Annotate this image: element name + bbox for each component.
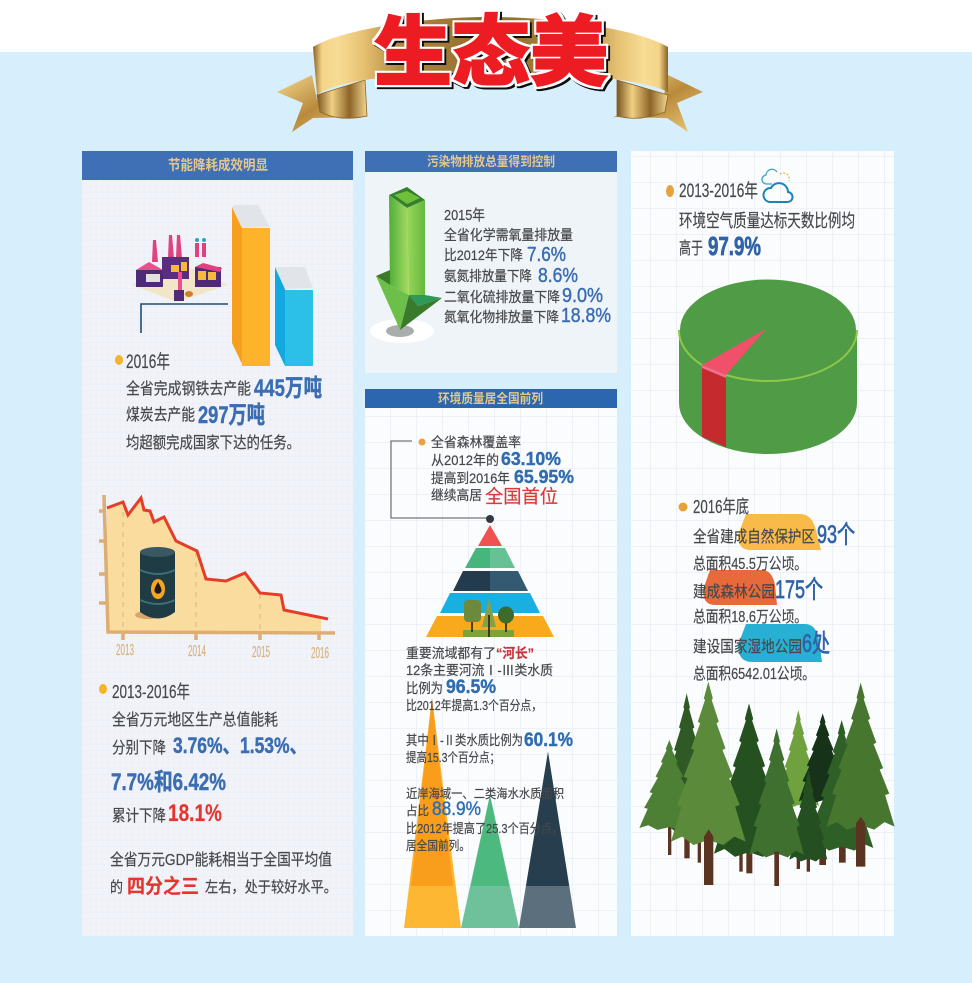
text: forest coverage: 全国首位 bbox=[485, 486, 558, 507]
text: pollutant reductions: 9.0% bbox=[562, 285, 603, 307]
text: pollutant reductions: 全省化学需氧量排放量 bbox=[444, 227, 573, 243]
text: forest coverage: 提高到2016年 bbox=[431, 470, 510, 486]
icon: factory bbox=[132, 235, 228, 302]
highlight: cyan bbox=[738, 624, 822, 662]
axis labels: 2013 bbox=[116, 642, 134, 659]
connector line bbox=[141, 304, 228, 333]
text: energy per GDP: 累计下降 bbox=[112, 807, 166, 825]
text: water quality: 比2012年提高1.3个百分点， bbox=[406, 698, 542, 713]
text: water quality: 比例为 bbox=[406, 681, 443, 696]
text: air quality bbox=[666, 180, 855, 261]
text: water quality: 比2012年提高了25.3个百分点， bbox=[406, 821, 563, 836]
text: nature reserves: 总面积18.6万公顷。 bbox=[693, 608, 807, 626]
text: forest coverage: 从2012年的 bbox=[431, 453, 499, 468]
text: water quality: 占比 bbox=[406, 803, 429, 818]
text: pollutant reductions: 8.6% bbox=[538, 265, 578, 287]
line chart: energy decline bbox=[99, 495, 335, 662]
text: water quality: 居全国前列。 bbox=[406, 838, 470, 853]
bar chart: capacity cuts bbox=[232, 205, 313, 366]
text: pollutant reductions bbox=[444, 207, 611, 327]
text: pollutant reductions: 18.8% bbox=[561, 305, 611, 327]
text: energy per GDP: 全省万元GDP能耗相当于全国平均值 bbox=[110, 851, 332, 869]
title ribbon bbox=[277, 11, 703, 132]
text: pollutant reductions: 比2012年下降 bbox=[444, 247, 523, 263]
icon: cloud and sun bbox=[762, 169, 793, 202]
text: 2016 capacity: 全省完成钢铁去产能 bbox=[126, 380, 251, 398]
title: 生态美 bbox=[374, 11, 608, 96]
text: air quality: 2013-2016年 bbox=[679, 180, 758, 202]
text: 2016 capacity: 2016年 bbox=[126, 351, 170, 373]
text: energy per GDP bbox=[99, 682, 337, 898]
text: energy per GDP: 四分之三 bbox=[127, 874, 199, 898]
text: pollutant reductions: 氨氮排放量下降 bbox=[444, 268, 532, 284]
highlight: red bbox=[703, 570, 777, 605]
text: air quality: 高于 bbox=[679, 239, 703, 258]
panel: energy saving bbox=[82, 151, 353, 936]
text: nature reserves bbox=[678, 497, 855, 683]
heading: energy saving: 节能降耗成效明显 bbox=[168, 157, 268, 173]
icon: green down arrow bbox=[370, 187, 442, 343]
text: water quality: 88.9% bbox=[432, 799, 481, 820]
text: 2016 capacity: 均超额完成国家下达的任务。 bbox=[126, 434, 300, 452]
text: forest coverage: 全省森林覆盖率 bbox=[431, 434, 521, 450]
panel: air and nature bbox=[631, 151, 895, 936]
heading: environment quality bbox=[365, 389, 617, 408]
text: 2016 capacity bbox=[115, 351, 322, 452]
text: nature reserves: 总面积45.5万公顷。 bbox=[693, 555, 807, 573]
icon: pyramid trees bbox=[463, 598, 514, 637]
axis labels bbox=[116, 642, 329, 662]
ribbon: right tail bbox=[613, 75, 703, 132]
text: water quality: 60.1% bbox=[524, 730, 573, 751]
text: water quality: 其中Ⅰ-Ⅱ类水质比例为 bbox=[406, 733, 523, 748]
text: energy per GDP: 分别下降 bbox=[112, 739, 166, 757]
heading: environment quality: 环境质量居全国前列 bbox=[438, 391, 543, 406]
text: pollutant reductions: 氮氧化物排放量下降 bbox=[444, 309, 559, 325]
ribbon: main band bbox=[313, 17, 668, 95]
axis labels: 2015 bbox=[252, 644, 270, 661]
text: air quality: 97.9% bbox=[708, 231, 761, 261]
text: energy per GDP: 3.76%、1.53%、 bbox=[173, 733, 307, 758]
text: nature reserves: 93个 bbox=[817, 521, 855, 549]
text: water quality: 96.5% bbox=[446, 677, 496, 698]
text: nature reserves: 全省建成自然保护区 bbox=[693, 528, 815, 546]
text: energy per GDP: 的 bbox=[110, 879, 123, 896]
text: water quality: 近岸海域一、二类海水水质面积 bbox=[406, 786, 564, 801]
heading: pollutants bbox=[365, 151, 617, 172]
text: forest coverage: 继续高居 bbox=[431, 487, 482, 503]
pyramid chart bbox=[426, 515, 554, 637]
panel: environment quality bbox=[365, 389, 617, 936]
heading: energy saving bbox=[82, 151, 353, 180]
text: energy per GDP: 全省万元地区生产总值能耗 bbox=[112, 711, 278, 729]
axis labels: 2016 bbox=[311, 645, 329, 662]
connector line bbox=[391, 441, 490, 518]
text: air quality: 环境空气质量达标天数比例均 bbox=[679, 211, 855, 231]
text: nature reserves: 6处 bbox=[802, 630, 830, 658]
text: pollutant reductions: 二氧化硫排放量下降 bbox=[444, 289, 560, 305]
text: 2016 capacity: 煤炭去产能 bbox=[126, 406, 195, 424]
text: nature reserves: 175个 bbox=[775, 576, 823, 604]
panel: pollutants bbox=[365, 151, 617, 373]
text: 2016 capacity: 445万吨 bbox=[254, 375, 322, 402]
text: energy per GDP: 2013-2016年 bbox=[112, 682, 190, 702]
icon: oil barrel bbox=[135, 547, 175, 619]
text: pollutant reductions: 2015年 bbox=[444, 207, 485, 224]
text: energy per GDP: 左右，处于较好水平。 bbox=[205, 878, 337, 896]
text: nature reserves: 总面积6542.01公顷。 bbox=[693, 665, 815, 683]
text: nature reserves: 建设国家湿地公园 bbox=[693, 638, 802, 656]
text: energy per GDP: 18.1% bbox=[168, 800, 222, 827]
text: water quality bbox=[406, 646, 573, 853]
tall triangles chart bbox=[404, 698, 576, 928]
highlight: orange bbox=[738, 514, 821, 550]
axis labels: 2014 bbox=[188, 643, 206, 660]
ribbon: left loop bbox=[317, 80, 367, 118]
illustration: pine forest bbox=[639, 682, 895, 886]
text: nature reserves: 建成森林公园 bbox=[693, 583, 775, 601]
text: forest coverage: 65.95% bbox=[514, 467, 574, 487]
text: forest coverage bbox=[418, 434, 574, 507]
text: water quality: “河长” bbox=[496, 646, 534, 661]
text: water quality: 重要流域都有了 bbox=[406, 646, 496, 661]
text: water quality: 提高15.3个百分点； bbox=[406, 750, 500, 766]
ribbon: left tail bbox=[277, 75, 367, 132]
text: nature reserves: 2016年底 bbox=[693, 497, 749, 517]
pie chart: 3D cylinder bbox=[679, 280, 857, 454]
text: forest coverage: 63.10% bbox=[501, 449, 561, 469]
ribbon: right loop bbox=[617, 80, 668, 118]
text: pollutant reductions: 7.6% bbox=[527, 244, 566, 266]
text: energy per GDP: 7.7%和6.42% bbox=[111, 769, 226, 796]
heading: pollutants: 污染物排放总量得到控制 bbox=[427, 154, 555, 169]
text: water quality: 12条主要河流Ⅰ-Ⅲ类水质 bbox=[406, 662, 553, 678]
text: 2016 capacity: 297万吨 bbox=[198, 402, 265, 429]
